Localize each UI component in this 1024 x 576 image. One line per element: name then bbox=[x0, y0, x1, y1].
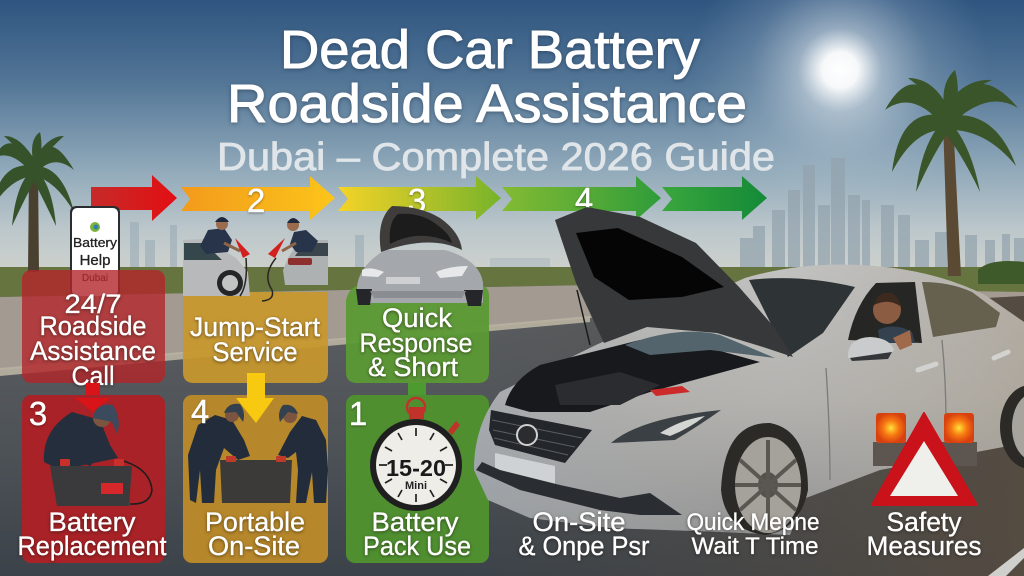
panel: top green quick response bbox=[346, 285, 489, 383]
panel: top amber jump-start: Jump-Start bbox=[190, 312, 320, 342]
arrow 3 yellow-green with number: 3 bbox=[408, 182, 426, 219]
label: portable on-site bbox=[205, 507, 305, 561]
background: sky bbox=[0, 0, 1024, 270]
arrow 3 yellow-green with number bbox=[338, 176, 501, 220]
panel number 3: 3 bbox=[29, 395, 47, 432]
icon: stopwatch 15-20 minutes: Mini bbox=[405, 480, 427, 492]
grass strip bbox=[0, 267, 1024, 297]
panel: top red roadside call: Roadside bbox=[40, 311, 146, 341]
connector arrow down red bbox=[75, 383, 110, 412]
panel: top green quick response: & Short bbox=[368, 352, 458, 382]
illustration: small silver car with open hood bbox=[356, 206, 483, 306]
panel: top red roadside call: Call bbox=[72, 361, 114, 391]
windscreen lower reflection bbox=[625, 332, 775, 358]
illustration: main silver car with open hood bbox=[474, 207, 1024, 535]
panel: top green quick response: Quick bbox=[382, 303, 452, 333]
connector head red over panel bbox=[75, 398, 110, 412]
windshield bbox=[749, 278, 855, 357]
arrow 2 orange with number: 2 bbox=[247, 182, 265, 219]
label: on-site bbox=[518, 507, 650, 561]
palm tree left bbox=[0, 132, 74, 272]
arrow 2 orange with number bbox=[181, 176, 335, 220]
title: Roadside Assistance bbox=[227, 74, 747, 134]
road lane marking bbox=[988, 548, 1024, 576]
label: portable on-site: Portable bbox=[205, 507, 305, 537]
headlight bbox=[611, 410, 721, 443]
arrow 1 red bbox=[91, 175, 177, 221]
panel: top amber jump-start: Service bbox=[212, 337, 298, 367]
panel: bottom amber portable on-site bbox=[183, 373, 328, 563]
label: on-site: On-Site bbox=[532, 507, 626, 537]
arrow 4 green with number bbox=[502, 176, 661, 220]
panel: top red roadside call: Assistance bbox=[30, 336, 156, 366]
icon: phone Battery Help Dubai: Battery bbox=[73, 235, 118, 250]
car body tone bbox=[474, 265, 1024, 535]
panel number 1: 1 bbox=[349, 395, 367, 432]
driver bbox=[873, 293, 915, 350]
label: battery replacement: Replacement bbox=[18, 531, 167, 561]
icon: worker and battery bbox=[44, 405, 152, 506]
icon: phone Battery Help Dubai bbox=[70, 206, 120, 296]
engine bay bbox=[505, 340, 760, 412]
label: safety measures: Measures bbox=[866, 531, 982, 561]
icon: phone Battery Help Dubai: Help bbox=[80, 252, 110, 269]
icon: stopwatch 15-20 minutes: 15-20 bbox=[386, 455, 446, 481]
icon: warning beacons and triangle bbox=[872, 413, 977, 505]
hood strut bbox=[577, 290, 590, 345]
illustration: jump-start cars and technicians bbox=[183, 217, 328, 301]
driver window bbox=[848, 282, 922, 343]
rear window bbox=[922, 282, 1000, 337]
arrow 4 green with number: 4 bbox=[575, 181, 593, 218]
label: battery pack use bbox=[363, 507, 471, 561]
icon: stopwatch 15-20 minutes bbox=[370, 398, 462, 511]
door lines and handles bbox=[826, 340, 946, 480]
sun bbox=[690, 0, 990, 220]
connector green bbox=[408, 383, 426, 397]
label: battery pack use: Pack Use bbox=[363, 531, 471, 561]
side mirror bbox=[848, 337, 894, 358]
bush right bbox=[978, 261, 1024, 284]
license plate bbox=[495, 453, 555, 485]
label: quick wait time: Wait T Time bbox=[692, 533, 818, 560]
label: battery replacement bbox=[18, 507, 167, 561]
panel: top green quick response: Response bbox=[360, 328, 472, 358]
panel number 4: 4 bbox=[191, 393, 209, 430]
title: Dubai – Complete 2026 Guide bbox=[217, 136, 775, 179]
front wheel bbox=[721, 423, 808, 535]
pavement bbox=[0, 285, 1024, 372]
arrow 5 dark green bbox=[662, 176, 767, 220]
panel: top red roadside call: 24/7 bbox=[64, 289, 122, 319]
car body bbox=[474, 265, 1024, 535]
panel: top amber jump-start bbox=[183, 292, 328, 383]
label: safety measures: Safety bbox=[886, 507, 962, 537]
panel: top red roadside call bbox=[22, 270, 165, 391]
grille bbox=[489, 410, 592, 463]
distant skyline right bbox=[740, 158, 1024, 268]
title bbox=[217, 20, 775, 179]
panel: bottom green battery pack use bbox=[346, 395, 489, 563]
label: battery replacement: Battery bbox=[48, 507, 136, 537]
title: Dead Car Battery bbox=[280, 20, 700, 80]
label: battery pack use: Battery bbox=[372, 507, 459, 537]
label: quick wait time: Quick Mepne bbox=[686, 509, 820, 536]
open hood bbox=[555, 207, 793, 357]
palm tree right bbox=[885, 70, 1018, 276]
panel: bottom red battery replacement bbox=[18, 395, 167, 563]
road bbox=[0, 296, 1024, 576]
distant skyline left bbox=[100, 222, 700, 268]
label: safety measures bbox=[866, 507, 982, 561]
label: quick wait time bbox=[686, 509, 820, 560]
road kerb bbox=[0, 316, 590, 376]
label: on-site: & Onpe Psr bbox=[518, 531, 650, 561]
arrow down yellow bbox=[236, 373, 274, 423]
icon: phone Battery Help Dubai: Dubai bbox=[82, 273, 108, 284]
rear wheel bbox=[1000, 385, 1024, 469]
label: portable on-site: On-Site bbox=[208, 531, 300, 561]
icon: two workers and battery bbox=[188, 404, 328, 503]
lower bumper intake bbox=[476, 462, 682, 515]
